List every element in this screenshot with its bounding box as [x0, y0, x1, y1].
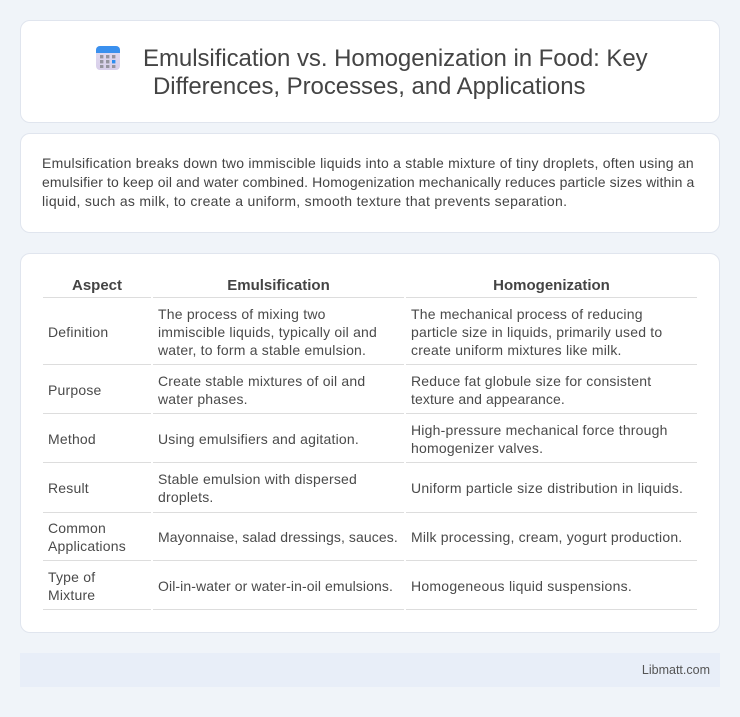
- row: purpose: Purpose: [48, 382, 102, 398]
- panel: introduction: [20, 133, 720, 233]
- row: result: Uniform particle size distribution in liquids.: [411, 480, 683, 496]
- footer bar: [20, 653, 720, 687]
- row: purpose: [43, 373, 697, 414]
- row: purpose: Reduce fat globule size for consistent: [411, 373, 651, 389]
- row: definition: immiscible liquids, typically oil and: [158, 324, 377, 340]
- table header: Emulsification: [227, 277, 330, 294]
- row: method: Method: [48, 431, 96, 447]
- row: common applications: Mayonnaise, salad dressings, sauces.: [158, 529, 398, 545]
- row: method: [43, 422, 697, 463]
- title: Emulsification vs. Homogenization in Food: Key: [143, 45, 648, 72]
- row: purpose: Create stable mixtures of oil and: [158, 373, 365, 389]
- row: method: homogenizer valves.: [411, 440, 543, 456]
- row: result: droplets.: [158, 489, 214, 505]
- row: purpose: texture and appearance.: [411, 391, 565, 407]
- row: definition: The process of mixing two: [158, 306, 326, 322]
- row: purpose: water phases.: [158, 391, 248, 407]
- table header: [43, 277, 697, 298]
- row: result: [43, 471, 697, 513]
- row: definition: particle size in liquids, primarily used to: [411, 324, 662, 340]
- row: definition: [43, 306, 697, 365]
- row: type of mixture: Mixture: [48, 587, 95, 603]
- row: common applications: Common: [48, 520, 106, 536]
- footer text: Libmatt.com: [642, 663, 710, 677]
- text block: introduction: [42, 155, 694, 209]
- panel: title card: [20, 20, 720, 123]
- row: definition: create uniform mixtures like milk.: [411, 342, 622, 358]
- title: [143, 45, 648, 100]
- row: type of mixture: Type of: [48, 569, 95, 585]
- row: definition: Definition: [48, 324, 108, 340]
- title: Differences, Processes, and Applications: [153, 73, 585, 100]
- row: type of mixture: [43, 569, 697, 610]
- text block: introduction: Emulsification breaks down two immiscible liquids into a stable mixture of tiny droplets, often using an: [42, 155, 694, 171]
- row: common applications: [43, 520, 697, 561]
- row: definition: water, to form a stable emulsion.: [158, 342, 366, 358]
- row: type of mixture: Homogeneous liquid suspensions.: [411, 578, 632, 594]
- panel: comparison table: [20, 253, 720, 633]
- row: common applications: Applications: [48, 538, 126, 554]
- row: type of mixture: Oil-in-water or water-in-oil emulsions.: [158, 578, 393, 594]
- table header: Homogenization: [493, 277, 610, 294]
- row: definition: The mechanical process of reducing: [411, 306, 643, 322]
- row: method: Using emulsifiers and agitation.: [158, 431, 359, 447]
- row: result: Stable emulsion with dispersed: [158, 471, 357, 487]
- row: method: High-pressure mechanical force through: [411, 422, 668, 438]
- icon: calendar: [96, 46, 120, 70]
- text block: introduction: emulsifier to keep oil and water combined. Homogenization mechanically reduces particle sizes within a: [42, 174, 694, 190]
- text block: introduction: liquid, such as milk, to create a uniform, smooth texture that prevents separation.: [42, 193, 567, 209]
- row: common applications: Milk processing, cream, yogurt production.: [411, 529, 682, 545]
- comparison table: [43, 277, 697, 610]
- row: result: Result: [48, 480, 89, 496]
- table header: Aspect: [72, 277, 122, 294]
